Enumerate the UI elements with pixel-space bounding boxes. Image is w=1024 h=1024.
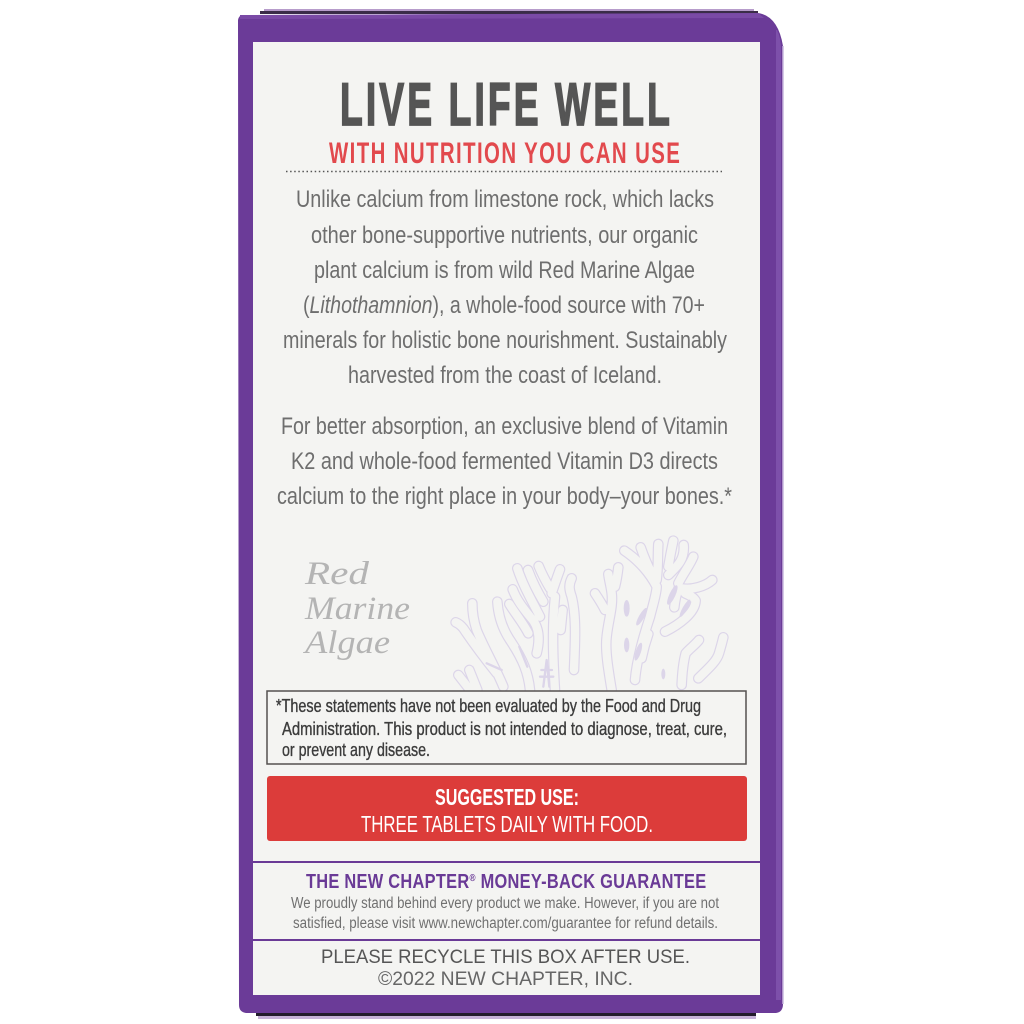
body paragraph: absorption bbox=[277, 413, 732, 510]
handwritten label: Red Marine Algae: Red bbox=[304, 556, 370, 592]
FDA disclaimer box: Administration. This product is not intended to diagnose, treat, cure, bbox=[282, 719, 727, 739]
body paragraph: calcium source: Unlike calcium from limestone rock, which lacks bbox=[296, 186, 714, 213]
title: LIVE LIFE WELL bbox=[340, 71, 670, 138]
section rules bbox=[253, 861, 760, 941]
guarantee section: MONEY-BACK GUARANTEE bbox=[476, 869, 706, 892]
body paragraph: calcium source: (Lithothamnion), a whole-food source with 70+ bbox=[303, 292, 705, 319]
body paragraph: calcium source bbox=[283, 186, 727, 389]
recycle and copyright: ©2022 NEW CHAPTER, INC. bbox=[378, 969, 633, 990]
guarantee section: We proudly stand behind every product we make. However, if you are not bbox=[291, 895, 720, 912]
dotted divider bbox=[286, 170, 722, 172]
body paragraph: absorption: calcium to the right place in your body–your bones.* bbox=[277, 483, 732, 510]
guarantee section: satisfied, please visit www.newchapter.com/guarantee for refund details. bbox=[293, 915, 718, 932]
body paragraph: absorption: K2 and whole-food fermented Vitamin D3 directs bbox=[291, 448, 718, 475]
FDA disclaimer box: or prevent any disease. bbox=[282, 740, 430, 760]
handwritten label: Red Marine Algae bbox=[303, 556, 410, 661]
body paragraph: calcium source: plant calcium is from wild Red Marine Algae bbox=[314, 257, 695, 284]
recycle and copyright: PLEASE RECYCLE THIS BOX AFTER USE. bbox=[321, 947, 690, 968]
box bottom flap bbox=[256, 1013, 756, 1019]
guarantee section bbox=[291, 869, 720, 932]
suggested use banner: SUGGESTED USE: bbox=[435, 784, 579, 810]
handwritten label: Red Marine Algae: Marine bbox=[304, 591, 410, 627]
guarantee section: ® bbox=[469, 872, 476, 883]
body paragraph: calcium source: harvested from the coast of Iceland. bbox=[348, 362, 662, 389]
subtitle: WITH NUTRITION YOU CAN USE bbox=[329, 137, 680, 170]
illustration: red marine algae coral bbox=[456, 541, 723, 690]
body paragraph: absorption: For better absorption, an exclusive blend of Vitamin bbox=[281, 413, 728, 440]
white label panel bbox=[253, 42, 760, 995]
handwritten label: Red Marine Algae: Algae bbox=[303, 625, 390, 661]
suggested use banner: THREE TABLETS DAILY WITH FOOD. bbox=[361, 811, 653, 837]
box top flap bbox=[260, 9, 758, 14]
FDA disclaimer box bbox=[267, 691, 746, 764]
suggested use banner bbox=[267, 776, 747, 841]
purple box face bbox=[238, 13, 783, 1013]
recycle and copyright bbox=[321, 947, 690, 990]
body paragraph: calcium source: minerals for holistic bone nourishment. Sustainably bbox=[283, 327, 727, 354]
FDA disclaimer box: *These statements have not been evaluated by the Food and Drug bbox=[276, 696, 701, 716]
guarantee section: THE NEW CHAPTER bbox=[306, 869, 469, 892]
body paragraph: calcium source: other bone-supportive nutrients, our organic bbox=[311, 222, 698, 249]
